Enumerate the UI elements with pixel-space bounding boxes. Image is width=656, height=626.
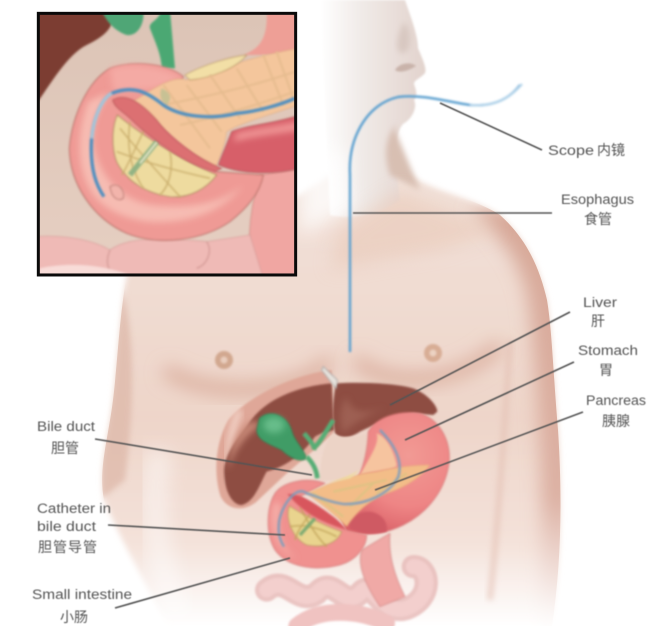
label: pancreas: Pancreas [586, 393, 646, 408]
label: bile duct: 胆管 [51, 440, 79, 456]
label: liver: Liver [583, 295, 618, 310]
inset pancreas head [113, 115, 217, 197]
label: stomach: Stomach [578, 343, 638, 358]
label: scope [548, 142, 625, 158]
jejunum [360, 533, 405, 607]
inset duodenum [69, 64, 263, 240]
label: bile duct [37, 419, 95, 456]
label: catheter in bile duct: bile duct [37, 519, 96, 534]
inset catheter [91, 90, 295, 197]
small intestine [267, 567, 426, 626]
duodenum [268, 480, 367, 568]
label: esophagus: 食管 [584, 211, 612, 227]
inset small intestine [40, 234, 262, 274]
catheter in organ [279, 430, 400, 547]
inset duodenal fold [113, 97, 222, 172]
nipples [215, 344, 442, 369]
label: pancreas [586, 393, 646, 429]
hole between organs [320, 433, 368, 481]
pancreas head [288, 506, 342, 546]
inset antrum [218, 115, 300, 173]
abdominal organs [216, 367, 449, 626]
inset green ducts [102, 10, 175, 68]
label: pancreas: 胰腺 [602, 413, 630, 429]
label: scope: 内镜 [597, 142, 625, 158]
stomach [333, 412, 449, 534]
scope tube [350, 84, 522, 352]
label: catheter in bile duct: Catheter in [37, 501, 111, 516]
human body figure [100, 0, 575, 626]
inset stomach top [246, 14, 294, 56]
label: small intestine: Small intestine [32, 587, 132, 602]
green gallbladder and ducts [257, 414, 333, 478]
label: stomach [578, 343, 638, 378]
inset panel: close-up of duodenum and pancreas [33, 8, 300, 278]
label: scope: Scope [548, 143, 594, 158]
label: liver [583, 295, 618, 329]
label: esophagus [561, 192, 634, 227]
inset liver [40, 14, 112, 102]
leader lines [95, 103, 583, 608]
torso [102, 165, 560, 626]
label: catheter in bile duct [37, 501, 111, 555]
label: small intestine [32, 587, 132, 625]
label: stomach: 胃 [599, 362, 613, 378]
label: esophagus: Esophagus [561, 192, 634, 207]
label: bile duct: Bile duct [37, 419, 95, 434]
label: catheter in bile duct: 胆管导管 [38, 539, 97, 555]
liver [216, 367, 437, 508]
ampullary fold [287, 494, 347, 530]
torso shading [100, 190, 575, 626]
pancreas body [307, 465, 430, 527]
inset papilla [110, 185, 124, 200]
inset black frame [38, 13, 296, 275]
inset pancreas body [133, 48, 298, 168]
inset jejunum [248, 170, 294, 274]
head and neck [300, 0, 425, 235]
inset bile duct in pancreas [130, 140, 158, 175]
label: small intestine: 小肠 [60, 609, 88, 625]
label: liver: 肝 [591, 313, 605, 329]
